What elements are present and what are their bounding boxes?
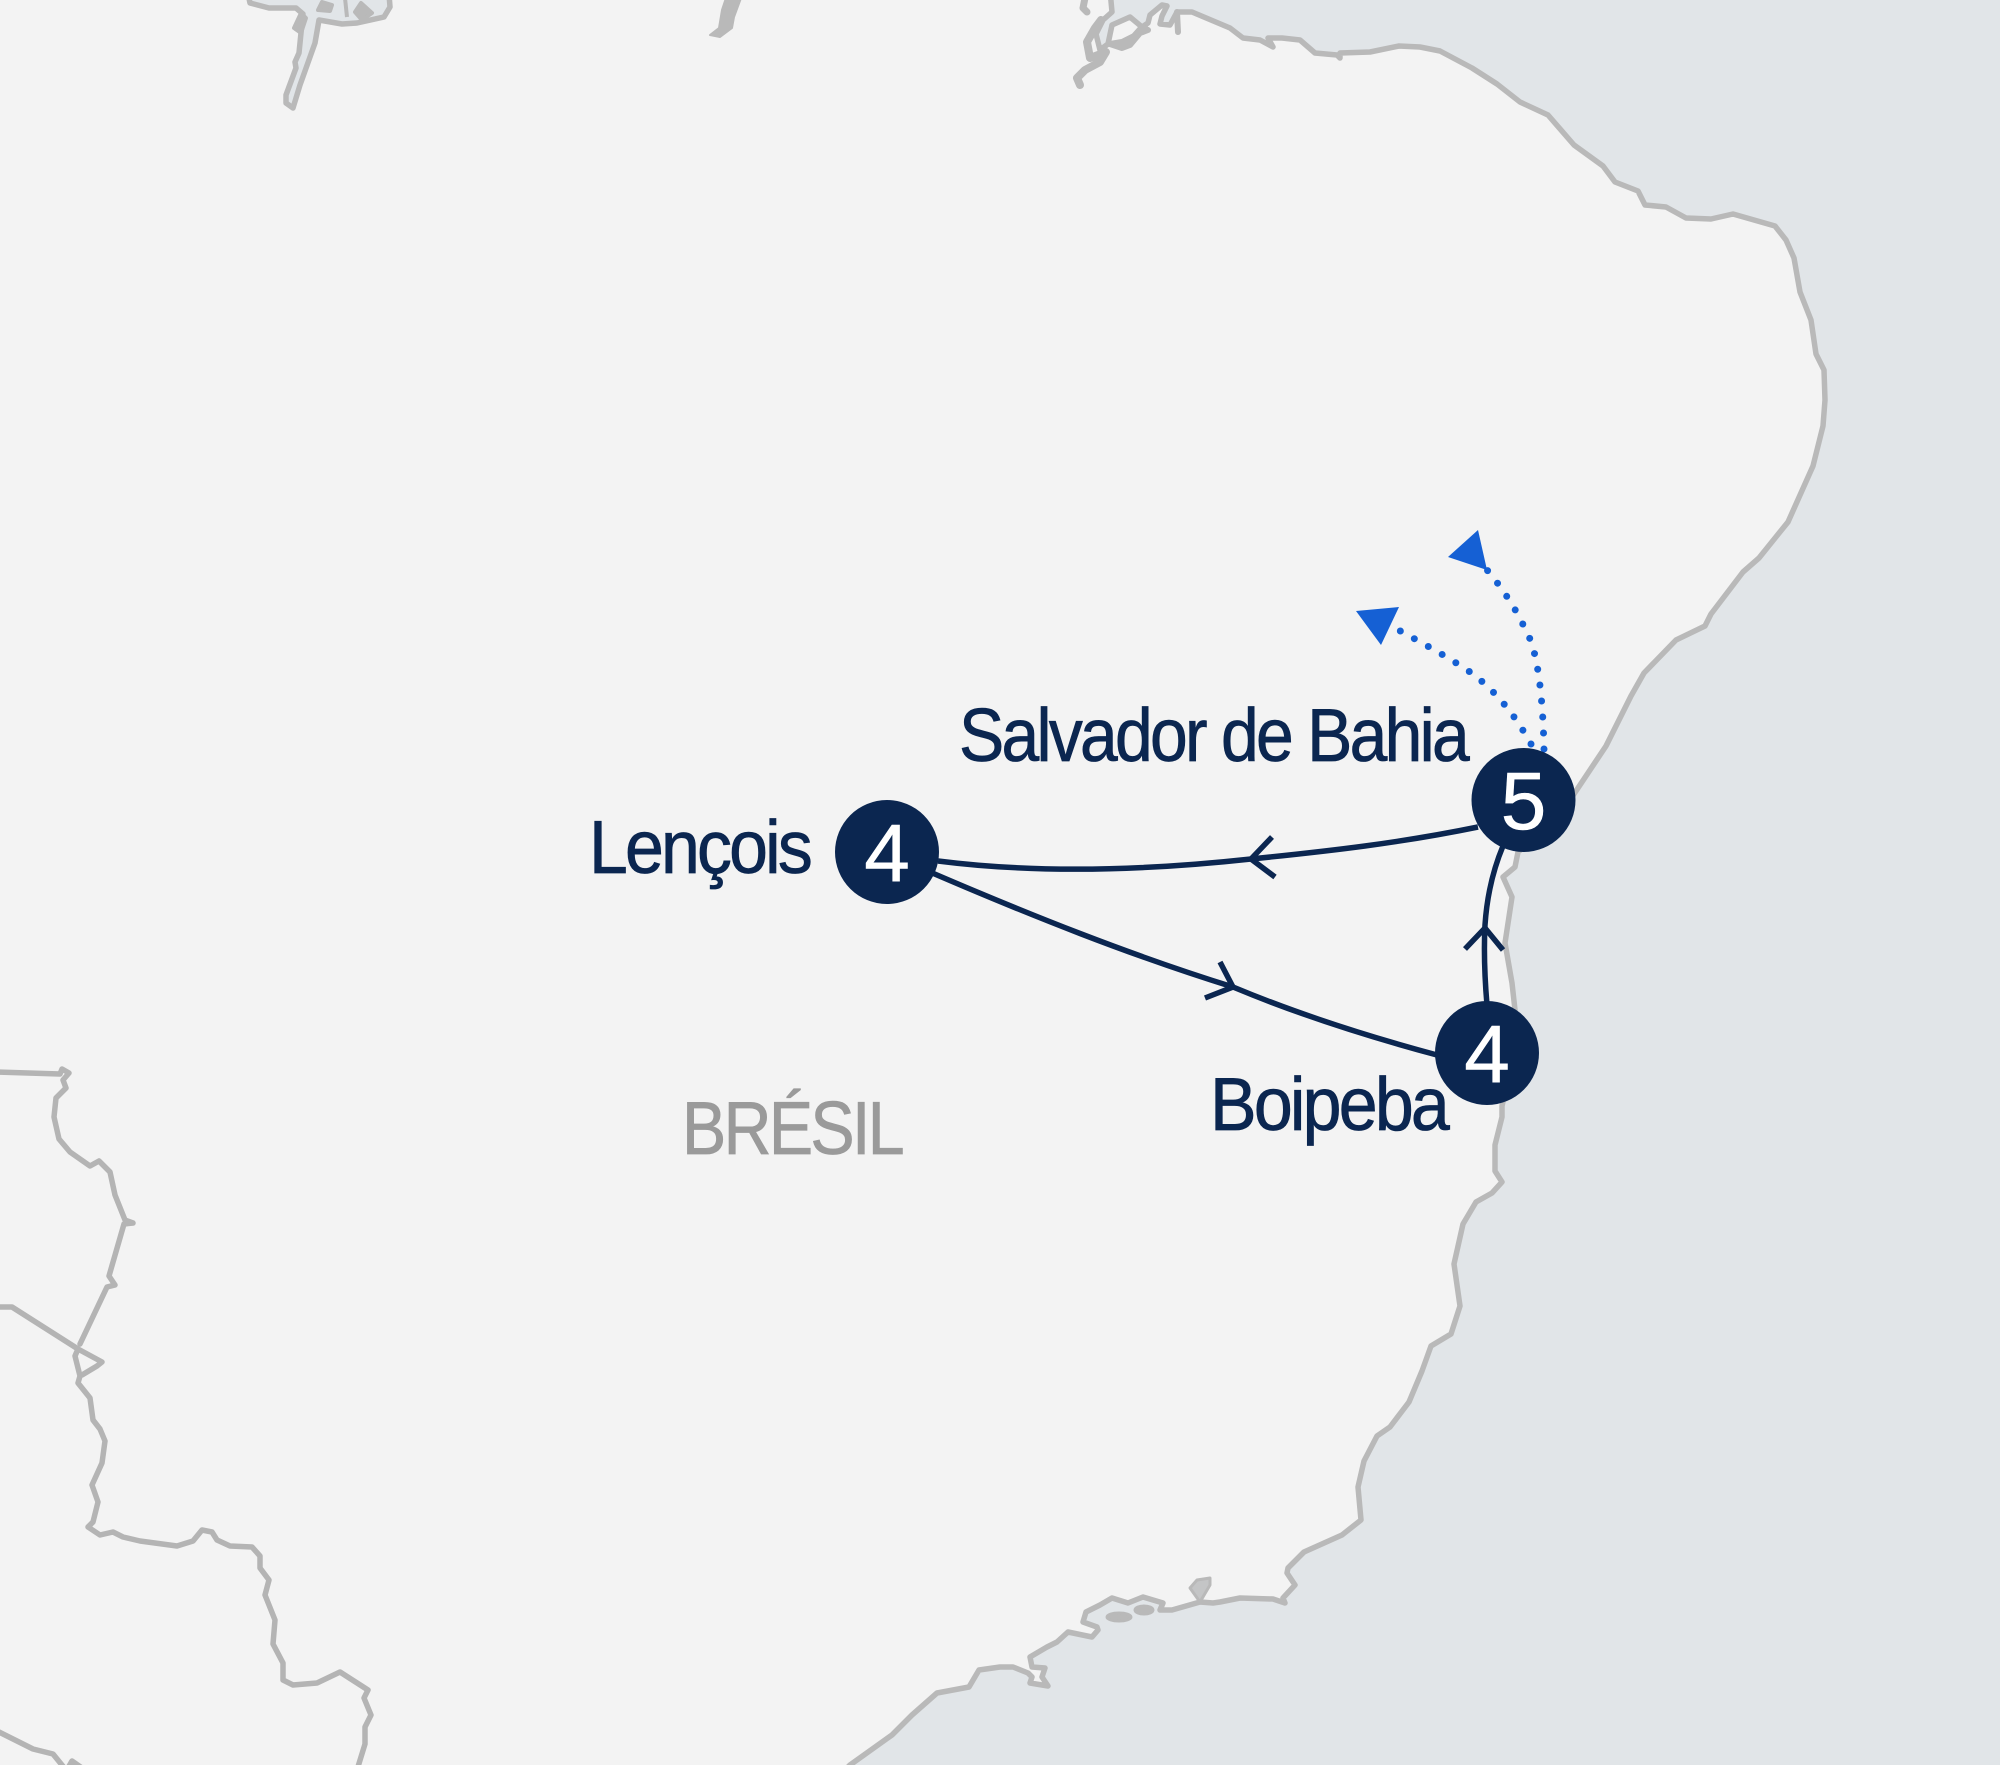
dotted exit route 1 — [1487, 570, 1544, 749]
arrowhead: exit 1 — [1448, 530, 1487, 570]
stop: Boipeba, 4 nights — [1435, 1001, 1539, 1105]
route: Boipeba to Salvador — [1465, 846, 1503, 1005]
label: Lençois: Lençois — [589, 805, 810, 889]
stop: Salvador de Bahia, 5 nights: 5 — [1501, 756, 1546, 847]
estuary islands — [294, 0, 372, 33]
stop: Lençois, 4 nights — [835, 800, 939, 904]
label: country name: BRÉSIL — [682, 1086, 903, 1170]
stop: Lençois, 4 nights: 4 — [864, 808, 910, 899]
Rio coast islands — [1107, 1578, 1210, 1621]
ocean and Atlantic coastline — [840, 0, 2000, 1765]
stop: Boipeba, 4 nights: 4 — [1464, 1009, 1510, 1100]
dotted exit route 2 — [1395, 628, 1531, 744]
route: Salvador to Lençois — [938, 827, 1478, 877]
label: Boipeba: Boipeba — [1210, 1062, 1450, 1146]
top river inlet — [710, 0, 741, 37]
route: Lençois to Boipeba — [930, 872, 1437, 1055]
label: Salvador de Bahia: Salvador de Bahia — [959, 693, 1470, 777]
western borders — [0, 1069, 371, 1765]
north-east estuary detail — [1077, 0, 1178, 85]
top-left river estuary — [248, 0, 390, 108]
stop: Salvador de Bahia, 5 nights — [1472, 748, 1576, 852]
arrowhead: exit 2 — [1356, 607, 1399, 645]
